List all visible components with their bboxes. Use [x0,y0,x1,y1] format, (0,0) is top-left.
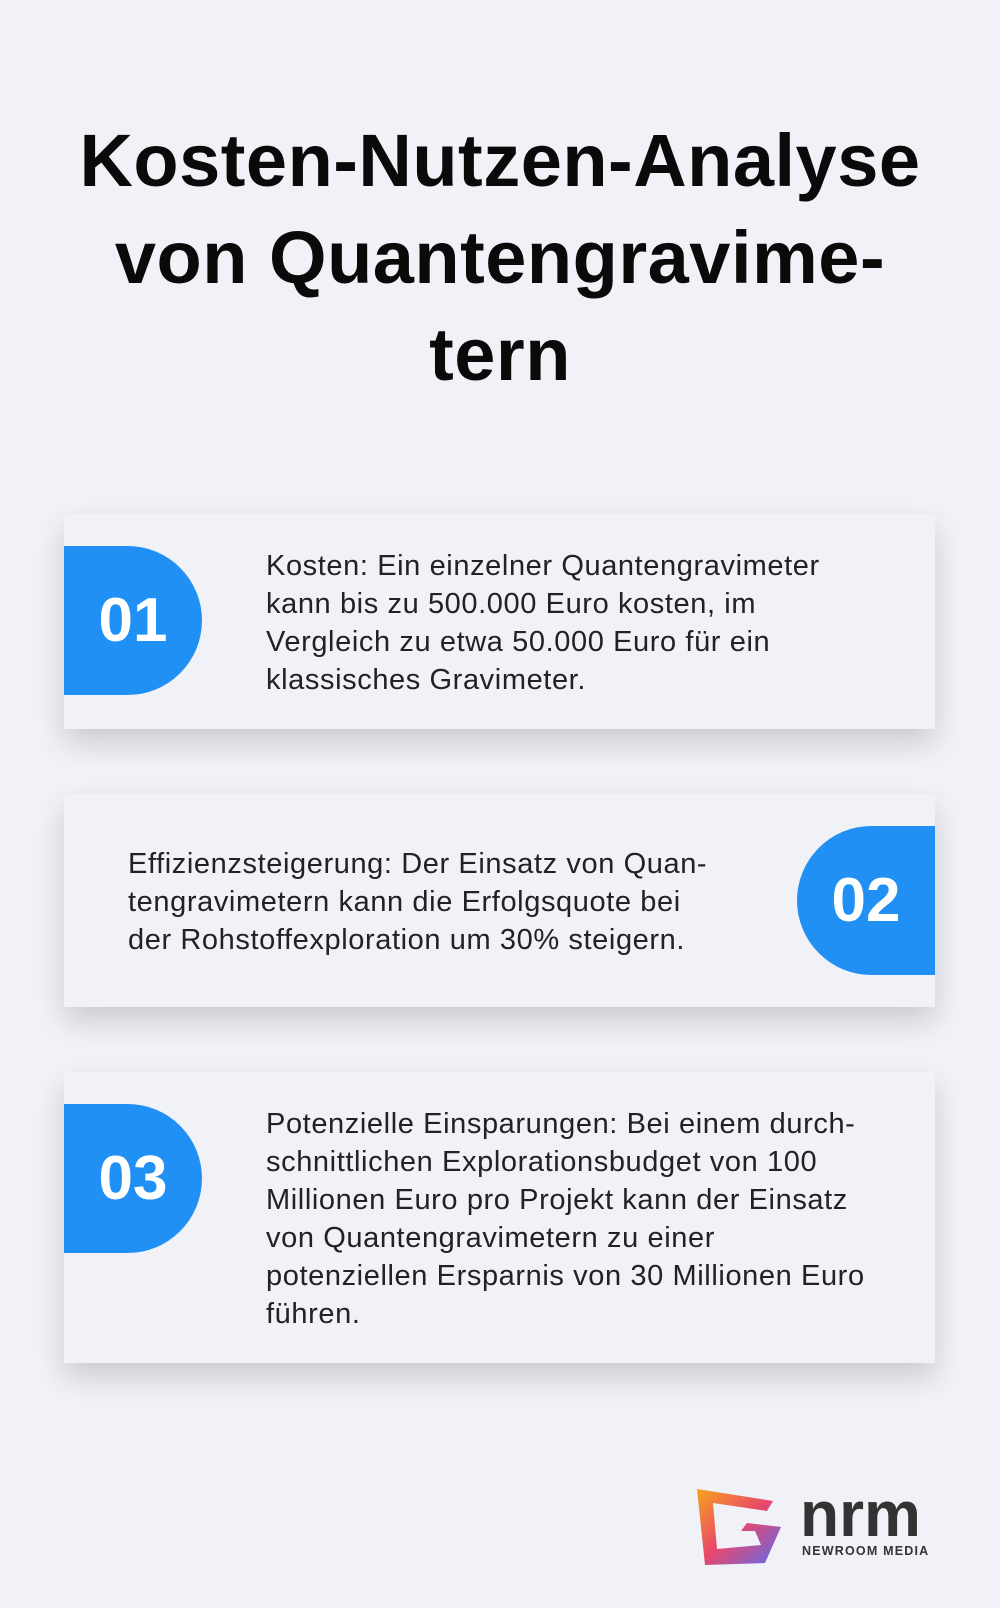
panel: card 01 [64,514,935,729]
text: Effizienz: Effizienzsteigerung: Der Einsatz von Quan- [128,848,707,880]
panel: card 02 [64,794,935,1007]
text: Einsparungen: Potenzielle Einsparungen: Bei einem durch- [266,1108,855,1140]
text: Effizienz: tengravimetern kann die Erfolgsquote bei [128,886,681,918]
text: Einsparungen: schnittlichen Explorationsbudget von 100 [266,1146,817,1178]
title [79,119,921,396]
logo: NEWROOM MEDIA [802,1544,929,1558]
text: Einsparungen: potenziellen Ersparnis von 30 Millionen Euro [266,1260,865,1292]
logo text: nrm [800,1478,921,1550]
text: Einsparungen [266,1108,865,1330]
badge 03 [64,1104,202,1253]
badge 02 [797,826,935,975]
panel: card 03 [64,1072,935,1363]
text: Kosten: Kosten: Ein einzelner Quantengravimeter [266,550,820,582]
text: Kosten [266,550,820,696]
text: Kosten: Vergleich zu etwa 50.000 Euro für ein [266,626,770,658]
text: Effizienz: der Rohstoffexploration um 30% steigern. [128,924,685,956]
logo [697,1478,929,1565]
text: Effizienz [128,848,707,956]
title: von Quantengravime- [115,216,885,299]
badge 01 [64,546,202,695]
title: Kosten-Nutzen-Analyse [79,119,921,202]
badge 03: 03 [99,1144,167,1213]
title: tern [429,313,571,396]
badge 01: 01 [99,586,167,655]
text: Einsparungen: von Quantengravimetern zu einer [266,1222,715,1254]
badge 02: 02 [832,866,900,935]
text: Kosten: kann bis zu 500.000 Euro kosten, im [266,588,756,620]
icon: logo mark [697,1489,781,1565]
text: Kosten: klassisches Gravimeter. [266,664,586,696]
text: Einsparungen: Millionen Euro pro Projekt kann der Einsatz [266,1184,848,1216]
text: Einsparungen: führen. [266,1298,360,1330]
